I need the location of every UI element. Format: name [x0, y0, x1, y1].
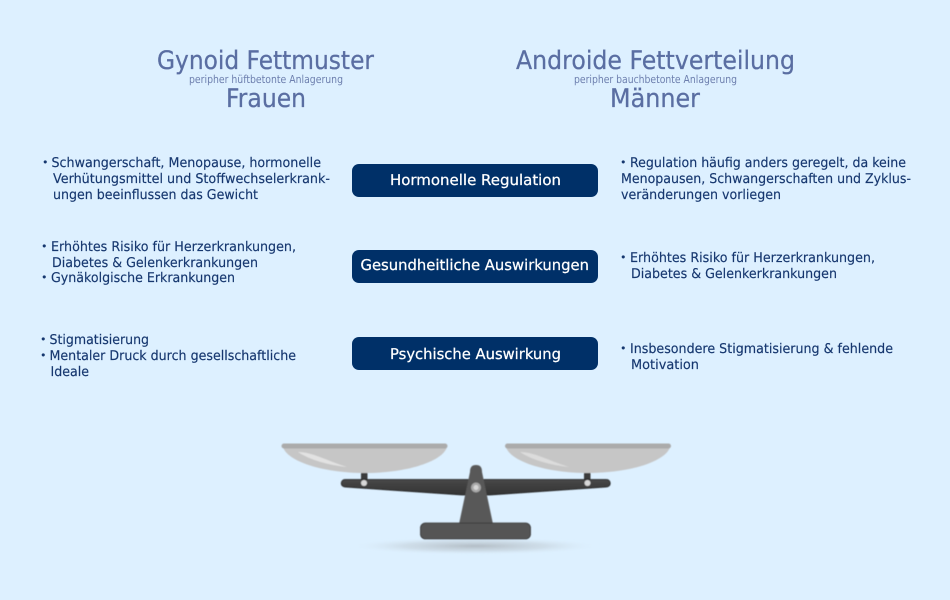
scale shadow: [347, 537, 603, 555]
pivots: [361, 480, 590, 492]
label pill: Psychische Auswirkung: Psychische Auswirkung: [390, 346, 561, 363]
text block: Männer Psyche: Motivation: [631, 358, 699, 373]
post: [459, 465, 493, 524]
text block: Frauen hormonell: ungen beeinflussen das Gewicht: [53, 188, 258, 203]
base: [420, 523, 530, 539]
label pill: Gesundheitliche Auswirkungen: [352, 250, 598, 283]
text block: Frauen Gesundheit: [41, 240, 296, 286]
text block: Frauen Gesundheit: Erhöhtes Risiko für Herzerkrankungen,: [51, 240, 296, 255]
text block: Frauen hormonell: Verhütungsmittel und Stoffwechselerkrank-: [53, 172, 330, 187]
text block: Männer hormonell: Menopausen, Schwangerschaften und Zyklus-: [621, 172, 911, 187]
heading: Gynoid: peripher hüftbetonte Anlagerung: [189, 73, 343, 86]
heading: Gynoid: Frauen: [226, 84, 306, 114]
text block: Männer Gesundheit: Diabetes & Gelenkerkrankungen: [631, 267, 837, 282]
text block: Frauen hormonell: •: [42, 156, 48, 169]
label pill: Hormonelle Regulation: Hormonelle Regulation: [390, 172, 561, 189]
text block: Frauen Psyche: [40, 333, 296, 380]
text block: Frauen Gesundheit: Gynäkolgische Erkrankungen: [51, 271, 235, 286]
text block: Frauen Gesundheit: Diabetes & Gelenkerkrankungen: [52, 256, 258, 271]
text block: Männer Gesundheit: •: [620, 251, 626, 264]
text block: Frauen Psyche: •: [40, 333, 46, 346]
text block: Frauen Gesundheit: •: [41, 271, 48, 284]
heading: Gynoid: [157, 46, 374, 114]
text block: Frauen Psyche: Mentaler Druck durch gesellschaftliche: [50, 349, 296, 364]
text block: Männer Gesundheit: [620, 251, 875, 282]
text block: Männer hormonell: •: [620, 156, 626, 169]
heading: Androide: Männer: [610, 84, 700, 114]
right pan: [505, 444, 671, 482]
heading: Androide: Androide Fettverteilung: [516, 46, 795, 76]
text block: Männer Psyche: •: [620, 342, 626, 355]
label pill: Gesundheitliche Auswirkungen: Gesundheitliche Auswirkungen: [360, 257, 589, 274]
beam: [341, 480, 610, 495]
label pill: Psychische Auswirkung: [352, 337, 598, 370]
heading: Androide: [516, 46, 795, 114]
text block: Männer Gesundheit: Erhöhtes Risiko für Herzerkrankungen,: [630, 251, 875, 266]
icon: balance scale: [282, 444, 671, 555]
left pan: [282, 444, 448, 482]
text block: Frauen hormonell: Schwangerschaft, Menopause, hormonelle: [52, 156, 321, 171]
label pill: Hormonelle Regulation: [352, 164, 598, 197]
text block: Männer Psyche: Insbesondere Stigmatisierung & fehlende: [630, 342, 893, 357]
text block: Männer Psyche: [620, 342, 893, 373]
text block: Frauen Psyche: Ideale: [50, 365, 89, 380]
heading: Gynoid: Gynoid Fettmuster: [157, 46, 374, 76]
text block: Männer hormonell: Regulation häufig anders geregelt, da keine: [630, 156, 906, 171]
text block: Männer hormonell: [620, 156, 911, 203]
text block: Frauen Gesundheit: •: [41, 240, 48, 253]
heading: Androide: peripher bauchbetonte Anlagerung: [574, 73, 737, 86]
text block: Frauen Psyche: •: [40, 349, 46, 362]
text block: Frauen hormonell: [42, 156, 330, 203]
text block: Männer hormonell: veränderungen vorliegen: [621, 188, 781, 203]
text block: Frauen Psyche: Stigmatisierung: [50, 333, 149, 348]
